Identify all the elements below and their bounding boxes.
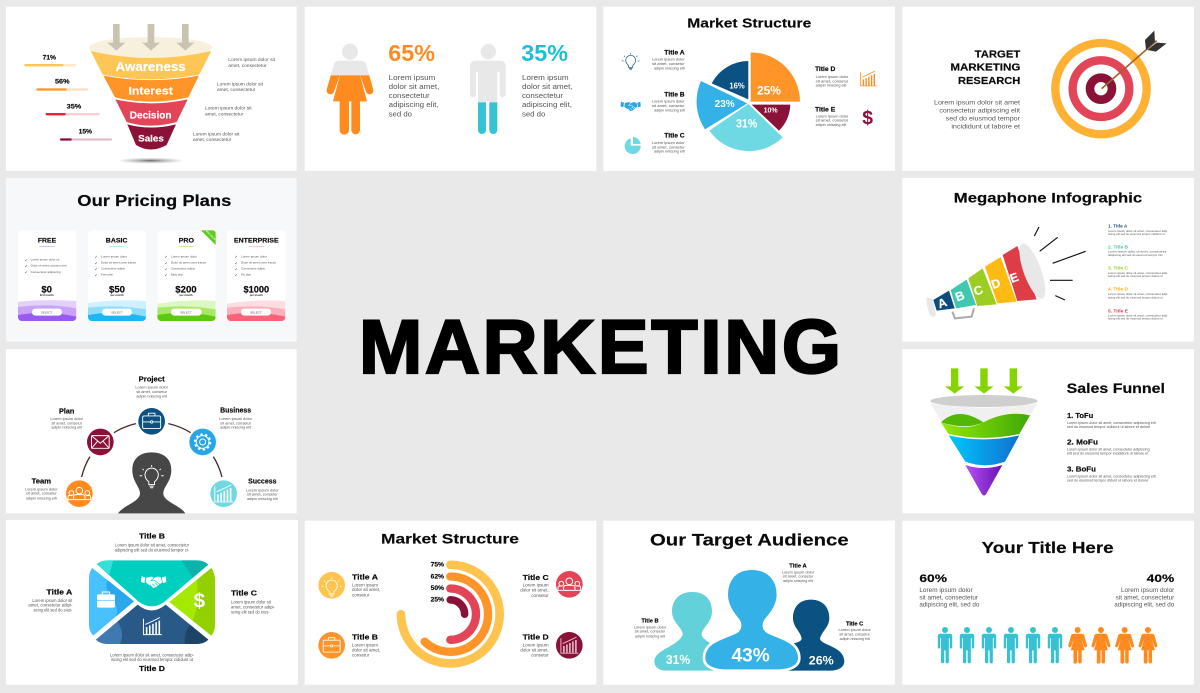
node: project: Project [139, 376, 165, 383]
icon: sound lines [1034, 227, 1086, 300]
heading: Our Pricing Plans [77, 193, 231, 210]
bar chart: stage percentages: 35% [67, 103, 82, 110]
card: enterprise [227, 230, 285, 321]
node: team: Team [32, 479, 51, 486]
chart: funnel layers [930, 395, 1038, 495]
heading: MARKETING [950, 63, 1020, 74]
labels: left titles: Title B [664, 92, 685, 98]
list: titles: iscing elit sed do eiusmod tempor cididunt ut [1108, 232, 1165, 236]
chart: radial bars [401, 565, 500, 663]
item: title D: Lorem ipsum [523, 642, 549, 647]
labels: left titles: sit amet, consetur [652, 103, 685, 108]
label: title C: adipin nniscing elit [840, 636, 870, 641]
stat: 35%: sed do [522, 109, 545, 118]
icon: small pie [625, 137, 641, 154]
panel: market structure rings [305, 521, 596, 685]
bar chart: stage percentages: 56% [55, 79, 70, 86]
node: success: Lorem ipsum dolor [246, 488, 279, 493]
card: free: Lorem ipsum dolor sit [31, 258, 60, 262]
heading: Your Title Here [982, 540, 1114, 557]
icon: megaphone: A [936, 295, 949, 311]
item: title C: dolor sit amet, [520, 587, 549, 592]
panel: envelope cycle [6, 520, 298, 685]
icon: megaphone: C [972, 282, 985, 299]
stat: 60% [919, 573, 980, 609]
heading: RESEARCH [958, 76, 1020, 87]
funnel descriptions: amet, consectetur [217, 87, 256, 92]
card: enterprise: ✓ [235, 273, 238, 277]
stat: 65%: Lorem ipsum [389, 73, 435, 82]
list: titles: 5. Title E [1108, 308, 1128, 313]
list: titles: Lorem ipsum dolor sit amet, consectetur adip [1108, 292, 1168, 296]
labels: right titles: Title E [815, 108, 835, 114]
card: enterprise: ENTERPRISE [234, 238, 279, 245]
label: title B: sit amet, consetur [635, 629, 666, 634]
node: business [189, 407, 253, 455]
chart: funnel stages: Interest [128, 85, 173, 97]
labels: right titles: adipin nniscing elit [816, 83, 847, 88]
node: business: sit amet, consetur [220, 420, 252, 425]
item: title B: consetur [352, 653, 370, 658]
icon: megaphone: B [953, 288, 967, 304]
text block: sed do eiusmod tempor [946, 115, 1021, 122]
card: free: Consectetur adipiscing [31, 270, 61, 274]
bar chart: stage percentages [24, 54, 112, 141]
card: enterprise: Pro plan [241, 273, 251, 277]
labels: left titles: adipin nniscing elit [654, 107, 685, 112]
panel: sales funnel [902, 349, 1194, 513]
list: funnel stages: elit sed do eiusmod tempor incididunt ut labore et [1067, 452, 1148, 456]
card: pro: ✓ [165, 273, 168, 277]
icon: right person 26% [787, 600, 844, 671]
label: title A: sit amet, consetur [783, 573, 814, 578]
labels: left titles: adipin nniscing elit [654, 65, 685, 70]
card: pro: SELECT [180, 310, 192, 314]
label: title A: Title A [789, 564, 807, 570]
labels: radial percentages: 75% [431, 561, 444, 568]
card: enterprise: SELECT [250, 310, 262, 314]
chart: pie: 16% [729, 81, 745, 91]
panel: target audience [603, 521, 895, 685]
stat: 65%: dolor sit amet, [389, 82, 439, 91]
label: title B: adipin nniscing elit [635, 633, 666, 638]
panel: megaphone infographic [902, 178, 1194, 342]
label: title C: amet, consetetur adipi- [231, 604, 275, 609]
label: title A: adipin nniscing elit [783, 578, 814, 583]
heading [950, 50, 1021, 87]
card: basic: per month [110, 293, 124, 297]
label: title D [110, 652, 194, 673]
labels: radial percentages [431, 561, 444, 604]
card: free: first month [40, 293, 54, 297]
card: enterprise: Lorem ipsum dolor [241, 254, 267, 258]
item: title D [520, 632, 583, 659]
labels: radial percentages: 25% [431, 597, 444, 604]
card: enterprise: Dolor sit amet cons tractor [241, 261, 276, 265]
labels: left titles: sit amet, consetur [652, 61, 685, 66]
item: title C: Lorem ipsum [523, 583, 549, 588]
list: funnel stages: Lorem ipsum dolor sit amet, consectetur adipiscing [1067, 448, 1150, 452]
card: free: ✓ [25, 259, 28, 263]
list: titles: Lorem ipsum dolor sit amet, consectetur adip [1108, 271, 1168, 275]
stat: 35%: Lorem ipsum [522, 73, 569, 82]
labels: right titles: adipin nniscing elit [816, 122, 847, 127]
node: business: Lorem ipsum dolor [219, 416, 253, 421]
heading: Market Structure [687, 16, 811, 31]
icon: dollar: $ [194, 589, 206, 612]
stat: 65%: 65% [388, 40, 435, 66]
labels: left titles: Title A [664, 50, 685, 56]
chart: people pictogram [938, 627, 1157, 664]
icon: right person 26%: 26% [809, 654, 834, 668]
card: pro: Dolor sit amet cons tractor [171, 261, 206, 265]
stat: 65%: consectetur [389, 91, 430, 100]
labels: left titles: Lorem ipsum dolor [652, 140, 685, 145]
panel: pricing plans [6, 178, 297, 342]
item: title B: Lorem ipsum [352, 643, 378, 648]
card: basic: Free plan [101, 273, 114, 277]
list: funnel stages: 2. MoFu [1067, 440, 1098, 447]
label: title C [838, 621, 871, 641]
card: pro: ✓ [165, 261, 168, 265]
card: pro: $200 [175, 284, 197, 294]
card: basic: Lorem ipsum dolor [101, 254, 127, 258]
item: title B [318, 632, 380, 659]
labels: left titles: sit amet, consetur [652, 144, 685, 149]
card: enterprise: ✓ [235, 261, 238, 265]
stat: 35%: adipiscing elit, [522, 100, 572, 109]
node: team: Lorem ipsum dolor [25, 486, 58, 491]
node: business: Business [220, 407, 251, 414]
icon: bulb [622, 53, 640, 70]
labels: left titles: Title C [664, 134, 685, 140]
icon: input arrows [89, 24, 212, 58]
item: title C: consetur [531, 593, 549, 598]
list: titles: iscing elit sed do eiusmod tempor didunt ut [1108, 295, 1163, 299]
card: enterprise: per month [250, 293, 263, 297]
icon: megaphone: E [1008, 270, 1021, 286]
icon: megaphone: D [989, 276, 1003, 292]
labels: right titles: sit amet, consetur [816, 78, 849, 83]
stat: 35%: dolor sit amet, [522, 82, 573, 91]
funnel descriptions: amet, consectetur [228, 63, 267, 68]
node: business: adipin nniscing elit [220, 425, 252, 430]
chart: pie: 25% [757, 84, 781, 98]
label: title B [115, 532, 190, 552]
card: free: SELECT [41, 310, 53, 314]
card: basic: ✓ [95, 273, 98, 277]
card: enterprise: ✓ [235, 255, 238, 259]
stat: 40% [1114, 573, 1175, 609]
label: title A: amet, consetetur adipi- [28, 603, 73, 608]
icon: green arrows [945, 368, 1023, 394]
card: free: $0 [41, 284, 52, 294]
card: enterprise: ✓ [235, 267, 238, 271]
panel: target marketing research [902, 7, 1194, 171]
list: titles: 3. Title C [1108, 265, 1128, 270]
card: pro: Lorem ipsum dolor [171, 254, 197, 258]
label: title B: Title B [139, 532, 165, 541]
panel: your title here [902, 521, 1194, 685]
card: basic [88, 230, 146, 321]
node: project: sit amet, consetur [136, 389, 168, 394]
funnel descriptions [193, 57, 276, 142]
card: pro: BEST VALUE [205, 230, 217, 241]
label: title A: Lorem ipsum dolor sit [32, 598, 73, 603]
labels: left titles [652, 50, 685, 154]
node: project: Lorem ipsum dolor [135, 384, 169, 389]
stat: 35%: 35% [521, 40, 568, 66]
heading: TARGET [975, 50, 1021, 61]
label: title C: Title C [231, 589, 257, 598]
label: title C [231, 589, 275, 614]
stat: 60%: Lorem ipsum dolor [919, 588, 973, 594]
stat: 65%: adipiscing elit, [389, 100, 439, 109]
icon: briefcase [97, 592, 115, 608]
icon: bar chart [861, 71, 877, 86]
text block: consectetur adipiscing elit [939, 107, 1020, 114]
node: team: sit amet, consetur [26, 491, 57, 496]
heading: Our Target Audience [650, 530, 849, 549]
label: title D: iscing elit sed do eiusmod tempor cididunt ut [111, 657, 194, 662]
card: free: ✓ [25, 271, 28, 275]
chart: funnel stages: Decision [130, 110, 172, 121]
stat: 65% [388, 40, 439, 118]
chart: funnel stages: Awareness [116, 60, 186, 74]
item: title D: Title D [523, 633, 549, 642]
item: title C: Title C [523, 573, 549, 582]
node: plan [50, 408, 114, 455]
main title: MARKETING [359, 305, 841, 390]
list: funnel stages: sed do eiusmod tempor cididunt ut labore et dolore [1067, 425, 1150, 429]
panel: funnel percentages [6, 7, 297, 171]
item: title A: dolor sit amet, [352, 587, 380, 592]
label: title A: Lorem ipsum dolor [782, 569, 815, 574]
list: titles: Lorem ipsum dolor sit amet, consectetur adip [1108, 314, 1168, 318]
bar chart: stage percentages: 71% [43, 54, 56, 61]
list: funnel stages: 1. ToFu [1067, 413, 1093, 420]
node: plan: sit amet, consetur [51, 420, 83, 425]
panel: gender split [305, 7, 596, 171]
list: titles: adipiscing elit sed do eiusmod tempor inci [1108, 253, 1163, 257]
funnel descriptions: amet, consectetur [205, 111, 244, 116]
icon: man 35% [470, 44, 506, 134]
icon: handshake [141, 576, 166, 588]
icon: target with arrow [1055, 31, 1167, 134]
card: enterprise: $1000 [243, 284, 269, 294]
card: enterprise: Consectetur adipis [241, 267, 266, 271]
label: title B: Title B [641, 619, 659, 625]
chart: pie [697, 52, 800, 151]
labels: right titles [815, 67, 849, 127]
node: success [210, 479, 279, 507]
chart: funnel stages [91, 51, 211, 149]
labels: right titles: Title D [815, 67, 836, 73]
bar chart: stage percentages: 15% [79, 129, 92, 136]
labels: right titles: Lorem ipsum dolor [816, 74, 849, 79]
item: title A: consetur [352, 592, 370, 597]
icon: woman 65% [327, 44, 373, 135]
text block [934, 99, 1021, 130]
icon: left person 31% [654, 592, 713, 671]
item: title B: Title B [352, 632, 379, 641]
label: title B: Lorem ipsum dolor [634, 624, 667, 629]
card: basic: SELECT [111, 310, 123, 314]
list: funnel stages: 3. BoFu [1067, 466, 1096, 473]
labels: radial percentages: 50% [431, 585, 444, 592]
card: pro: ✓ [165, 267, 168, 271]
stat: 60%: 60% [919, 573, 947, 585]
chart: pie: 10% [764, 106, 778, 115]
chart: pie: 31% [736, 117, 758, 131]
item: title A [318, 572, 380, 599]
label: title A [782, 564, 815, 583]
labels: left titles: Lorem ipsum dolor [652, 57, 685, 62]
card: basic: $50 [109, 284, 125, 294]
heading: Megaphone Infographic [954, 190, 1143, 205]
card: pro [157, 230, 217, 321]
stat: 65%: sed do [389, 109, 412, 118]
list: funnel stages [1067, 413, 1156, 483]
text block: incididunt ut labore et [951, 123, 1020, 130]
node: team [25, 479, 93, 507]
icon: center person 43% [704, 569, 799, 671]
chart: pie: 23% [715, 99, 735, 110]
icon: dollar: $ [862, 108, 873, 129]
label: title A: Title A [46, 587, 73, 596]
list: titles: Lorem ipsum dolor sit amet, consectetur [1108, 250, 1167, 254]
list: funnel stages: sed do eiusmod tempor didunt ut labore et dolore [1067, 479, 1148, 483]
node: success: adipin nniscing elit [247, 496, 278, 501]
icon: chart [143, 617, 162, 635]
list: funnel stages: Lorem ipsum dolor sit amet, consectetur adipiscing elit [1067, 474, 1156, 478]
list: titles [1108, 223, 1168, 321]
panel: market structure pie [603, 7, 895, 171]
stat: 60%: adipiscing elit, sed do [919, 603, 980, 609]
label: title D: Lorem ipsum dolor sit amet, consectetur adip- [110, 652, 194, 657]
funnel descriptions: Lorem ipsum dolor sit [228, 57, 276, 62]
card: basic: ✓ [95, 267, 98, 271]
item: title A: Lorem ipsum [352, 582, 378, 587]
card: pro: PRO [179, 238, 194, 245]
chart: envelope segments [89, 560, 215, 644]
labels: right titles: sit amet, consetur [816, 118, 849, 123]
stat: 35%: consectetur [522, 91, 564, 100]
panel: idea hub arc [6, 349, 297, 513]
list: titles: 1. Title A [1108, 223, 1128, 228]
node: project: adipin nniscing elit [136, 393, 168, 398]
funnel descriptions: Lorem ipsum dolor sit [193, 131, 240, 136]
node: plan: Plan [59, 408, 74, 415]
list: titles: 4. Title D [1108, 287, 1128, 292]
label: title B: Lorem ipsum dolor sit amet, consectetur [115, 543, 189, 548]
list: titles: 2. Title B [1108, 244, 1128, 249]
labels: radial percentages: 62% [431, 573, 444, 580]
card: free [18, 230, 76, 321]
item: title B: dolor sit amet, [352, 647, 380, 652]
label: title A: scing elit sed do eius- [34, 608, 73, 613]
card: basic: ✓ [95, 261, 98, 265]
label: title C: Lorem ipsum dolor [838, 627, 871, 632]
card: basic: ✓ [95, 255, 98, 259]
funnel descriptions: Lorem ipsum dolor sit [205, 106, 252, 111]
label: title C: Title C [846, 621, 863, 627]
card: free: FREE [38, 238, 57, 245]
label: title C: sit amet, consetur [839, 631, 871, 636]
node: success: Success [248, 479, 277, 486]
text block: Lorem ipsum dolor sit amet [934, 99, 1020, 106]
item: title A: Title A [352, 573, 379, 582]
arcs between nodes [82, 424, 222, 477]
card: pro: Consectetur adipis [171, 267, 196, 271]
list: titles: iscing elit sed do eiusmod tempor didunt ut [1108, 274, 1163, 278]
stat: 40%: Lorem ipsum dolor [1121, 588, 1174, 594]
node: plan: adipin nniscing elit [51, 425, 83, 430]
card: pro: per month [179, 293, 193, 297]
icon: head silhouette with bulb [118, 452, 185, 513]
stat: 40%: adipiscing elit, sed do [1114, 603, 1175, 609]
chart: funnel stages: Sales [138, 134, 164, 144]
label: title B [634, 619, 667, 638]
node: project [135, 376, 169, 435]
funnel shadow [117, 158, 184, 164]
card: basic: Dolor sit amet cons tractor [101, 261, 136, 265]
card: free: ✓ [25, 264, 28, 268]
label: title B: adipiscing elit sed do eiusmod tempor ci- [115, 547, 190, 552]
label: title C: Lorem ipsum dolor sit [231, 600, 272, 605]
list: titles: Lorem ipsum dolor sit amet, consectetur adip [1108, 229, 1168, 233]
item: title D: consetur [531, 653, 549, 658]
icon: megaphone [927, 240, 1050, 318]
card: basic: Consectetur adipis [101, 267, 126, 271]
stat: 60%: sit amet, consectetur [919, 595, 978, 601]
label: title D: Title D [139, 664, 165, 673]
icon: center person 43%: 43% [731, 645, 770, 666]
heading: Market Structure [381, 530, 519, 546]
heading: Sales Funnel [1067, 381, 1165, 396]
icon: left person 31%: 31% [666, 653, 690, 667]
label: title C: scing elit sed do eius- [231, 609, 270, 614]
labels: left titles: Lorem ipsum dolor [652, 99, 685, 104]
labels: left titles: adipin nniscing elit [654, 149, 685, 154]
card: pro: Basic plan [171, 273, 183, 277]
card: free: Dolor sit amet consetur pret [31, 264, 67, 268]
node: plan: Lorem ipsum dolor [50, 416, 84, 421]
icon: handshake [621, 102, 641, 111]
list: funnel stages: Lorem ipsum dolor sit amet, consectetur adipiscing elit [1067, 421, 1156, 425]
item: title D: dolor sit amet, [520, 647, 549, 652]
node: success: sit amet, consetur [247, 492, 278, 497]
stat: 40%: 40% [1147, 573, 1174, 585]
card: pro: ✓ [165, 255, 168, 259]
list: titles: iscing elit sed do eiusmod tempor didunt ut [1108, 317, 1163, 321]
funnel descriptions: Lorem ipsum dolor sit [217, 81, 264, 86]
labels: right titles: Lorem ipsum dolor [816, 113, 849, 118]
item: title C [520, 571, 583, 598]
stat: 40%: sit amet, consectetur [1116, 595, 1174, 601]
node: team: adipin nniscing elit [26, 495, 57, 500]
label: title A [28, 587, 73, 613]
card: basic: BASIC [106, 238, 128, 245]
funnel descriptions: amet, consectetur [193, 137, 232, 142]
stat: 35% [521, 40, 573, 118]
